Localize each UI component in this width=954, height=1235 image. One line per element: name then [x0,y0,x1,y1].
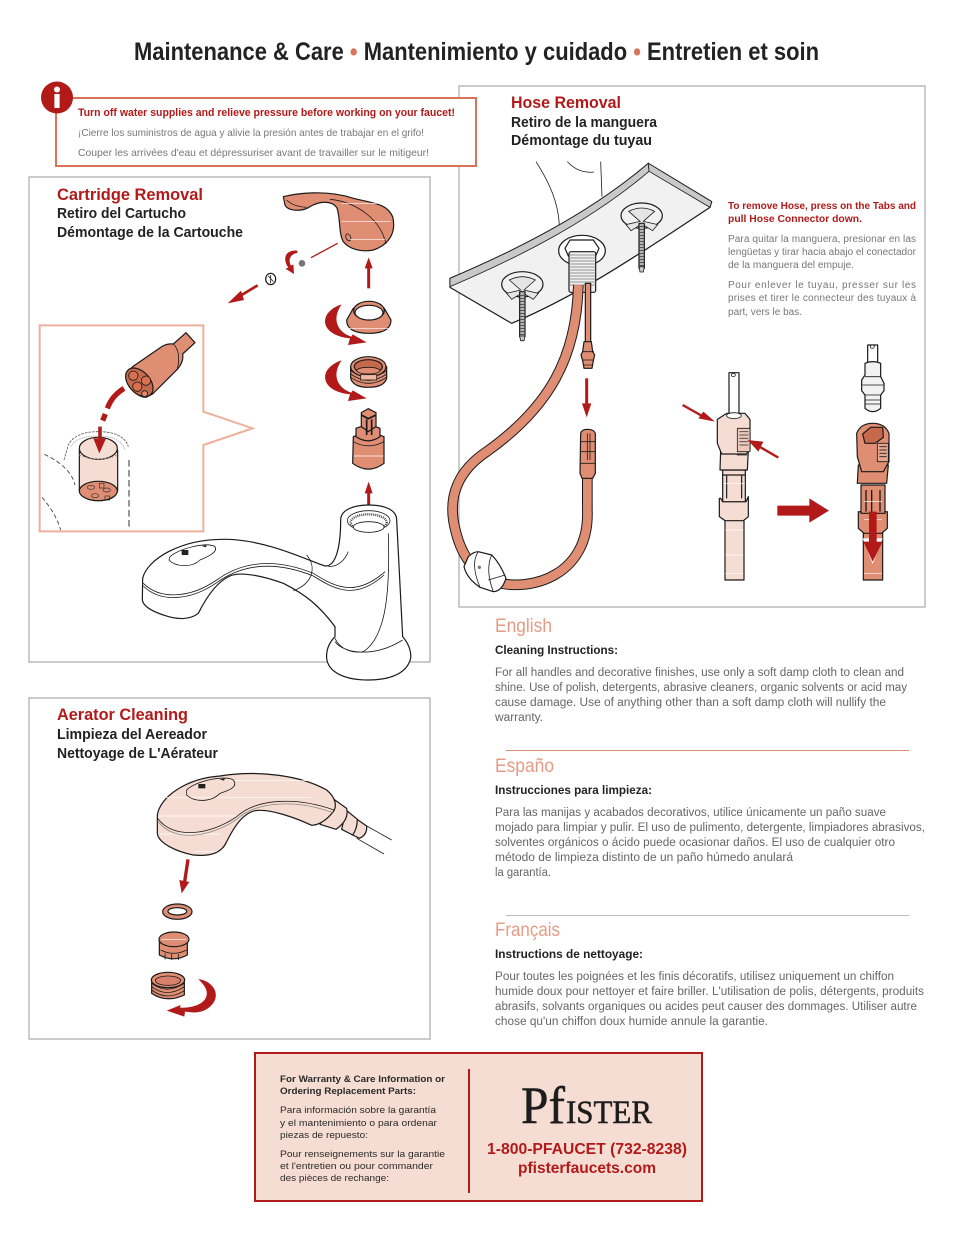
screw line [311,243,338,258]
heading: cartridge removal: Cartridge Removal [57,185,203,204]
collar rings [320,799,367,838]
hose weight [464,552,506,592]
callout: warning [41,82,476,166]
contact details [487,1141,687,1177]
callout text: ¡Cierre los suministros de agua y alivie la presión antes de trabajar en el grifo! [78,127,424,139]
callout text: Couper les arrivées d'eau et dépressuriser avant de travailler sur le mitigeur! [78,147,429,159]
panel: warranty footer [255,1053,702,1201]
heading: hose removal [511,93,658,149]
section: Español: Instrucciones para limpieza: [495,785,652,797]
cartridge body [120,333,195,402]
heading: hose removal: Hose Removal [511,93,621,112]
aerator insert [159,932,189,960]
text block: hose instructions: part, vers le bas. [728,307,802,318]
faucet [142,505,411,680]
heading: cartridge removal [57,185,243,241]
arrow: rotate nut [325,360,367,401]
warranty text: des pièces de rechange: [280,1173,389,1184]
heading: aerator cleaning: Nettoyage de L'Aérateur [57,745,218,762]
warranty text: et l'entretien ou pour commander [280,1161,433,1172]
callout text [78,107,455,159]
logo: Pfister: ISTER [566,1095,652,1131]
icon: rotate screw [285,251,297,274]
text block: hose instructions: pull Hose Connector down. [728,214,862,225]
warranty text: Pour renseignements sur la garantie [280,1149,445,1160]
title: Maintenance & Care • Mantenimiento y cuidado • Entretien et soin [134,38,819,66]
section: English: Cleaning Instructions: [495,645,618,657]
heading: aerator cleaning: Aerator Cleaning [57,705,188,724]
connector: separated [857,345,889,580]
icon: info [41,82,73,114]
set screw [266,260,305,285]
section: English: For all handles and decorative finishes, use only a soft damp cloth to clean and [495,667,904,679]
callout text: Turn off water supplies and relieve pressure before working on your faucet! [78,107,455,119]
illustration: hose removal [450,162,889,592]
mounting bolts [502,203,662,341]
small connector on wall line [581,342,595,368]
arrow: aerator down [179,859,189,893]
text block: hose instructions: Para quitar la manguera, presionar en las [728,234,916,245]
arrow: handle up [365,257,373,288]
contact details: pfisterfaucets.com [518,1160,656,1177]
illustration: cartridge exploded view [40,193,411,680]
text block: hose instructions: Pour enlever le tuyau, presser sur les [728,280,916,291]
logo: Pfister: Pf [521,1077,565,1135]
text block: hose instructions: To remove Hose, press on the Tabs and [728,201,916,212]
valve cavity [79,427,118,501]
section: Français: Instructions de nettoyage: [495,949,643,961]
panel: cartridge removal [29,177,430,680]
text block: hose instructions: lengüetas y tirar hacia abajo el conectador [728,247,917,258]
dashed arrow path [100,388,124,440]
section: English: warranty. [494,712,543,724]
heading: hose removal: Démontage du tuyau [511,132,652,149]
nut [351,357,387,387]
arrow: cartridge up [365,482,373,517]
inset: cartridge install [40,325,253,531]
arrow: squeeze left [683,405,715,422]
washer [163,904,192,919]
text block: hose instructions: de la manguera del empuje. [728,260,854,271]
arrow: next step [777,498,829,523]
section: Español [495,756,925,879]
hose connector end [580,429,595,478]
warranty text: piezas de repuesto: [280,1130,368,1141]
section: Español: método de limpieza distinto de un paño húmedo anulará [495,852,794,864]
section: English [494,616,907,724]
section: Español: solventes orgánicos o ácido puede ocasionar daños. El uso de cualquier otro [495,837,895,849]
logo: Pfister [521,1077,652,1135]
threaded shank [559,235,605,292]
collar [347,301,391,333]
heading: cartridge removal: Démontage de la Cartouche [57,224,243,241]
arrow: squeeze right [748,440,778,458]
panel: hose removal [450,86,925,607]
warranty text: Ordering Replacement Parts: [280,1086,416,1097]
section: Español: la garantía. [495,867,551,879]
illustration: aerator exploded view [151,774,392,1017]
section: Español: Para las manijas y acabados decorativos, utilice únicamente un paño suave [495,807,886,819]
hose line [453,283,591,585]
aerator housing [151,972,185,999]
arrow: screw out [228,285,258,303]
contact details: 1-800-PFAUCET (732-8238) [487,1141,687,1158]
connector: press on tabs [717,373,750,580]
text block: hose instructions: prises et tirer le connecteur des tuyaux à [728,293,916,304]
heading: aerator cleaning: Limpieza del Aereador [57,726,207,743]
hose lines [357,825,392,854]
heading: hose removal: Retiro de la manguera [511,114,658,131]
warranty text: Para información sobre la garantía [280,1105,437,1116]
section: Français: abrasifs, solvants organiques ou acides peut causer des dommages. Utiliser autre [495,1001,917,1013]
section: Français: chose qu'un chiffon doux humide annule la garantie. [495,1016,768,1028]
ghost faucet dashes [42,432,129,530]
text block: hose instructions [728,201,917,318]
arrow: pull down [863,512,883,564]
section: Français: humide doux pour nettoyer et faire briller. L'utilisation de polis, détergents, produits [495,986,924,998]
heading: cartridge removal: Retiro del Cartucho [57,205,186,222]
arrow: rotate collar [325,304,367,345]
warranty text: For Warranty & Care Information or [280,1074,445,1085]
section: Español: Españo [495,756,554,777]
section: Français [495,920,924,1028]
section: English: shine. Use of polish, detergents, abrasive cleaners, organic solvents or acid may [495,682,907,694]
handle [283,193,394,251]
arrow: rotate aerator [167,979,216,1017]
heading: aerator cleaning [57,705,218,762]
section: English: English [495,616,552,637]
section: Français: Pour toutes les poignées et les finis décoratifs, utilisez uniquement un chiffon [495,971,894,983]
warranty text: y el mantenimiento o para ordenar [280,1118,437,1129]
warranty text [280,1074,445,1184]
cartridge part [353,409,384,469]
mounting plate [450,163,712,323]
section: Français: Français [495,920,560,941]
section: English: cause damage. Use of anything other than a soft damp cloth will nullify the [495,697,886,709]
sprayer head [157,774,335,855]
section: Español: mojado para limpiar y pulir. El uso de pulimento, detergente, limpiadores abrasivos, [495,822,925,834]
panel: aerator cleaning [29,698,430,1039]
arrow: down to connector [582,378,591,417]
